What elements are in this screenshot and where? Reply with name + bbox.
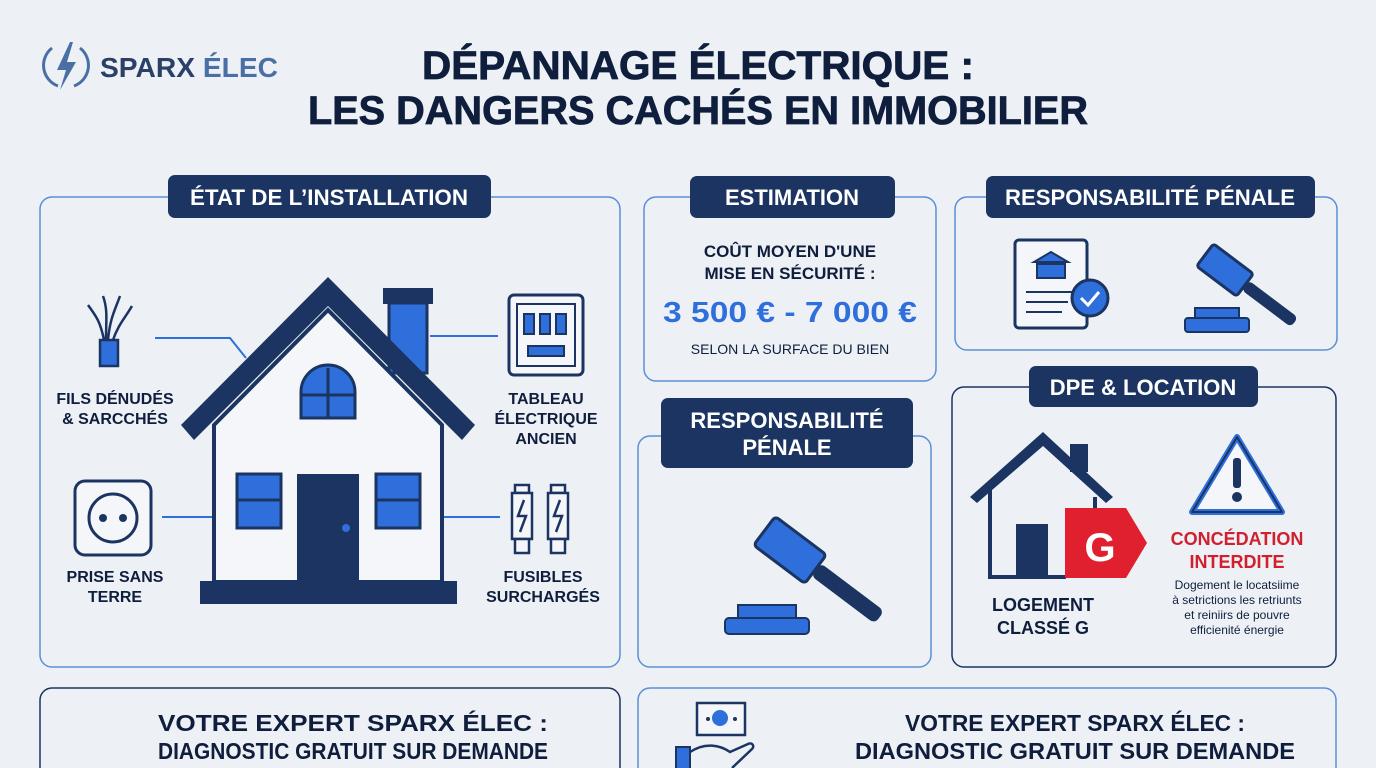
panel: bottom left CTA: DIAGNOSTIC GRATUIT SUR DEMANDE — [158, 738, 548, 764]
price: 3 500 € - 7 000 € — [663, 297, 917, 329]
text: coût moyen: COÛT MOYEN D'UNE — [704, 242, 876, 261]
heading: estimation — [690, 176, 895, 218]
heading: état: ÉTAT DE L’INSTALLATION — [190, 185, 468, 210]
text: logement classé G: CLASSÉ G — [997, 617, 1089, 638]
text: fusibles: SURCHARGÉS — [486, 587, 600, 606]
heading: RESPONSABILITÉ PÉNALE — [1005, 185, 1295, 210]
panel: bottom left CTA — [40, 688, 620, 768]
icon: house with G label — [970, 432, 1147, 578]
heading: RESPONSABILITÉ — [690, 408, 884, 433]
text: concédation interdite: INTERDITE — [1189, 552, 1285, 572]
title: LES DANGERS CACHÉS EN IMMOBILIER — [308, 88, 1088, 133]
text: prise sans terre: TERRE — [88, 589, 142, 606]
heading: PÉNALE — [742, 435, 832, 460]
text: detail: efficienité énergie — [1190, 623, 1284, 637]
house illustration — [181, 277, 475, 604]
title: DÉPANNAGE ÉLECTRIQUE : — [422, 43, 974, 88]
icon: warning — [1192, 437, 1282, 512]
icon: fuses — [512, 485, 568, 553]
icon: house with G label: G — [1084, 526, 1116, 570]
panel: estimation — [644, 176, 936, 381]
text: tableau: ANCIEN — [515, 431, 577, 448]
logo — [44, 42, 278, 90]
heading: état — [168, 175, 491, 218]
panel: bottom right CTA: DIAGNOSTIC GRATUIT SUR DEMANDE — [855, 738, 1295, 764]
panel: état de l'installation — [40, 175, 620, 667]
panel: bottom left CTA: VOTRE EXPERT SPARX ÉLEC : — [158, 709, 548, 736]
text: tableau: ÉLECTRIQUE — [494, 409, 598, 428]
text: concédation interdite: CONCÉDATION — [1171, 528, 1303, 549]
icon: socket — [75, 481, 151, 555]
panel: responsabilité pénale top — [955, 176, 1337, 350]
text: fusibles: FUSIBLES — [503, 569, 583, 586]
text: coût moyen: MISE EN SÉCURITÉ : — [705, 264, 875, 283]
text: detail: et reiniirs de pouvre — [1184, 608, 1290, 622]
text: prise sans terre: PRISE SANS — [67, 569, 164, 586]
text: fils dénudés: FILS DÉNUDÉS — [56, 389, 174, 408]
icon: bare wires — [88, 296, 132, 366]
panel: bottom right CTA — [638, 688, 1336, 768]
text: detail: à setrictions les retriunts — [1172, 593, 1302, 607]
heading — [661, 398, 913, 468]
logo: SPARX ÉLEC — [100, 52, 278, 83]
text: tableau: TABLEAU — [508, 391, 584, 408]
icon: money in hand — [676, 703, 753, 768]
connector lines — [155, 336, 500, 517]
text: detail: Dogement le locatsiime — [1175, 578, 1300, 592]
panel: bottom right CTA: VOTRE EXPERT SPARX ÉLEC : — [905, 709, 1245, 736]
icon: legal document — [1015, 240, 1108, 328]
heading: estimation: ESTIMATION — [725, 185, 859, 210]
icon: electrical panel — [509, 295, 583, 375]
panel: responsabilité pénale middle — [638, 398, 931, 667]
heading — [1029, 366, 1258, 407]
title — [308, 43, 1088, 133]
icon: gavel — [1185, 244, 1303, 334]
heading: DPE & LOCATION — [1050, 375, 1236, 400]
panel: DPE & location — [952, 366, 1336, 667]
icon: gavel large — [725, 516, 890, 634]
text: logement classé G: LOGEMENT — [992, 595, 1094, 615]
text: fils dénudés: & SARCCHÉS — [62, 409, 168, 428]
heading — [986, 176, 1315, 218]
text: selon surface: SELON LA SURFACE DU BIEN — [691, 341, 889, 357]
